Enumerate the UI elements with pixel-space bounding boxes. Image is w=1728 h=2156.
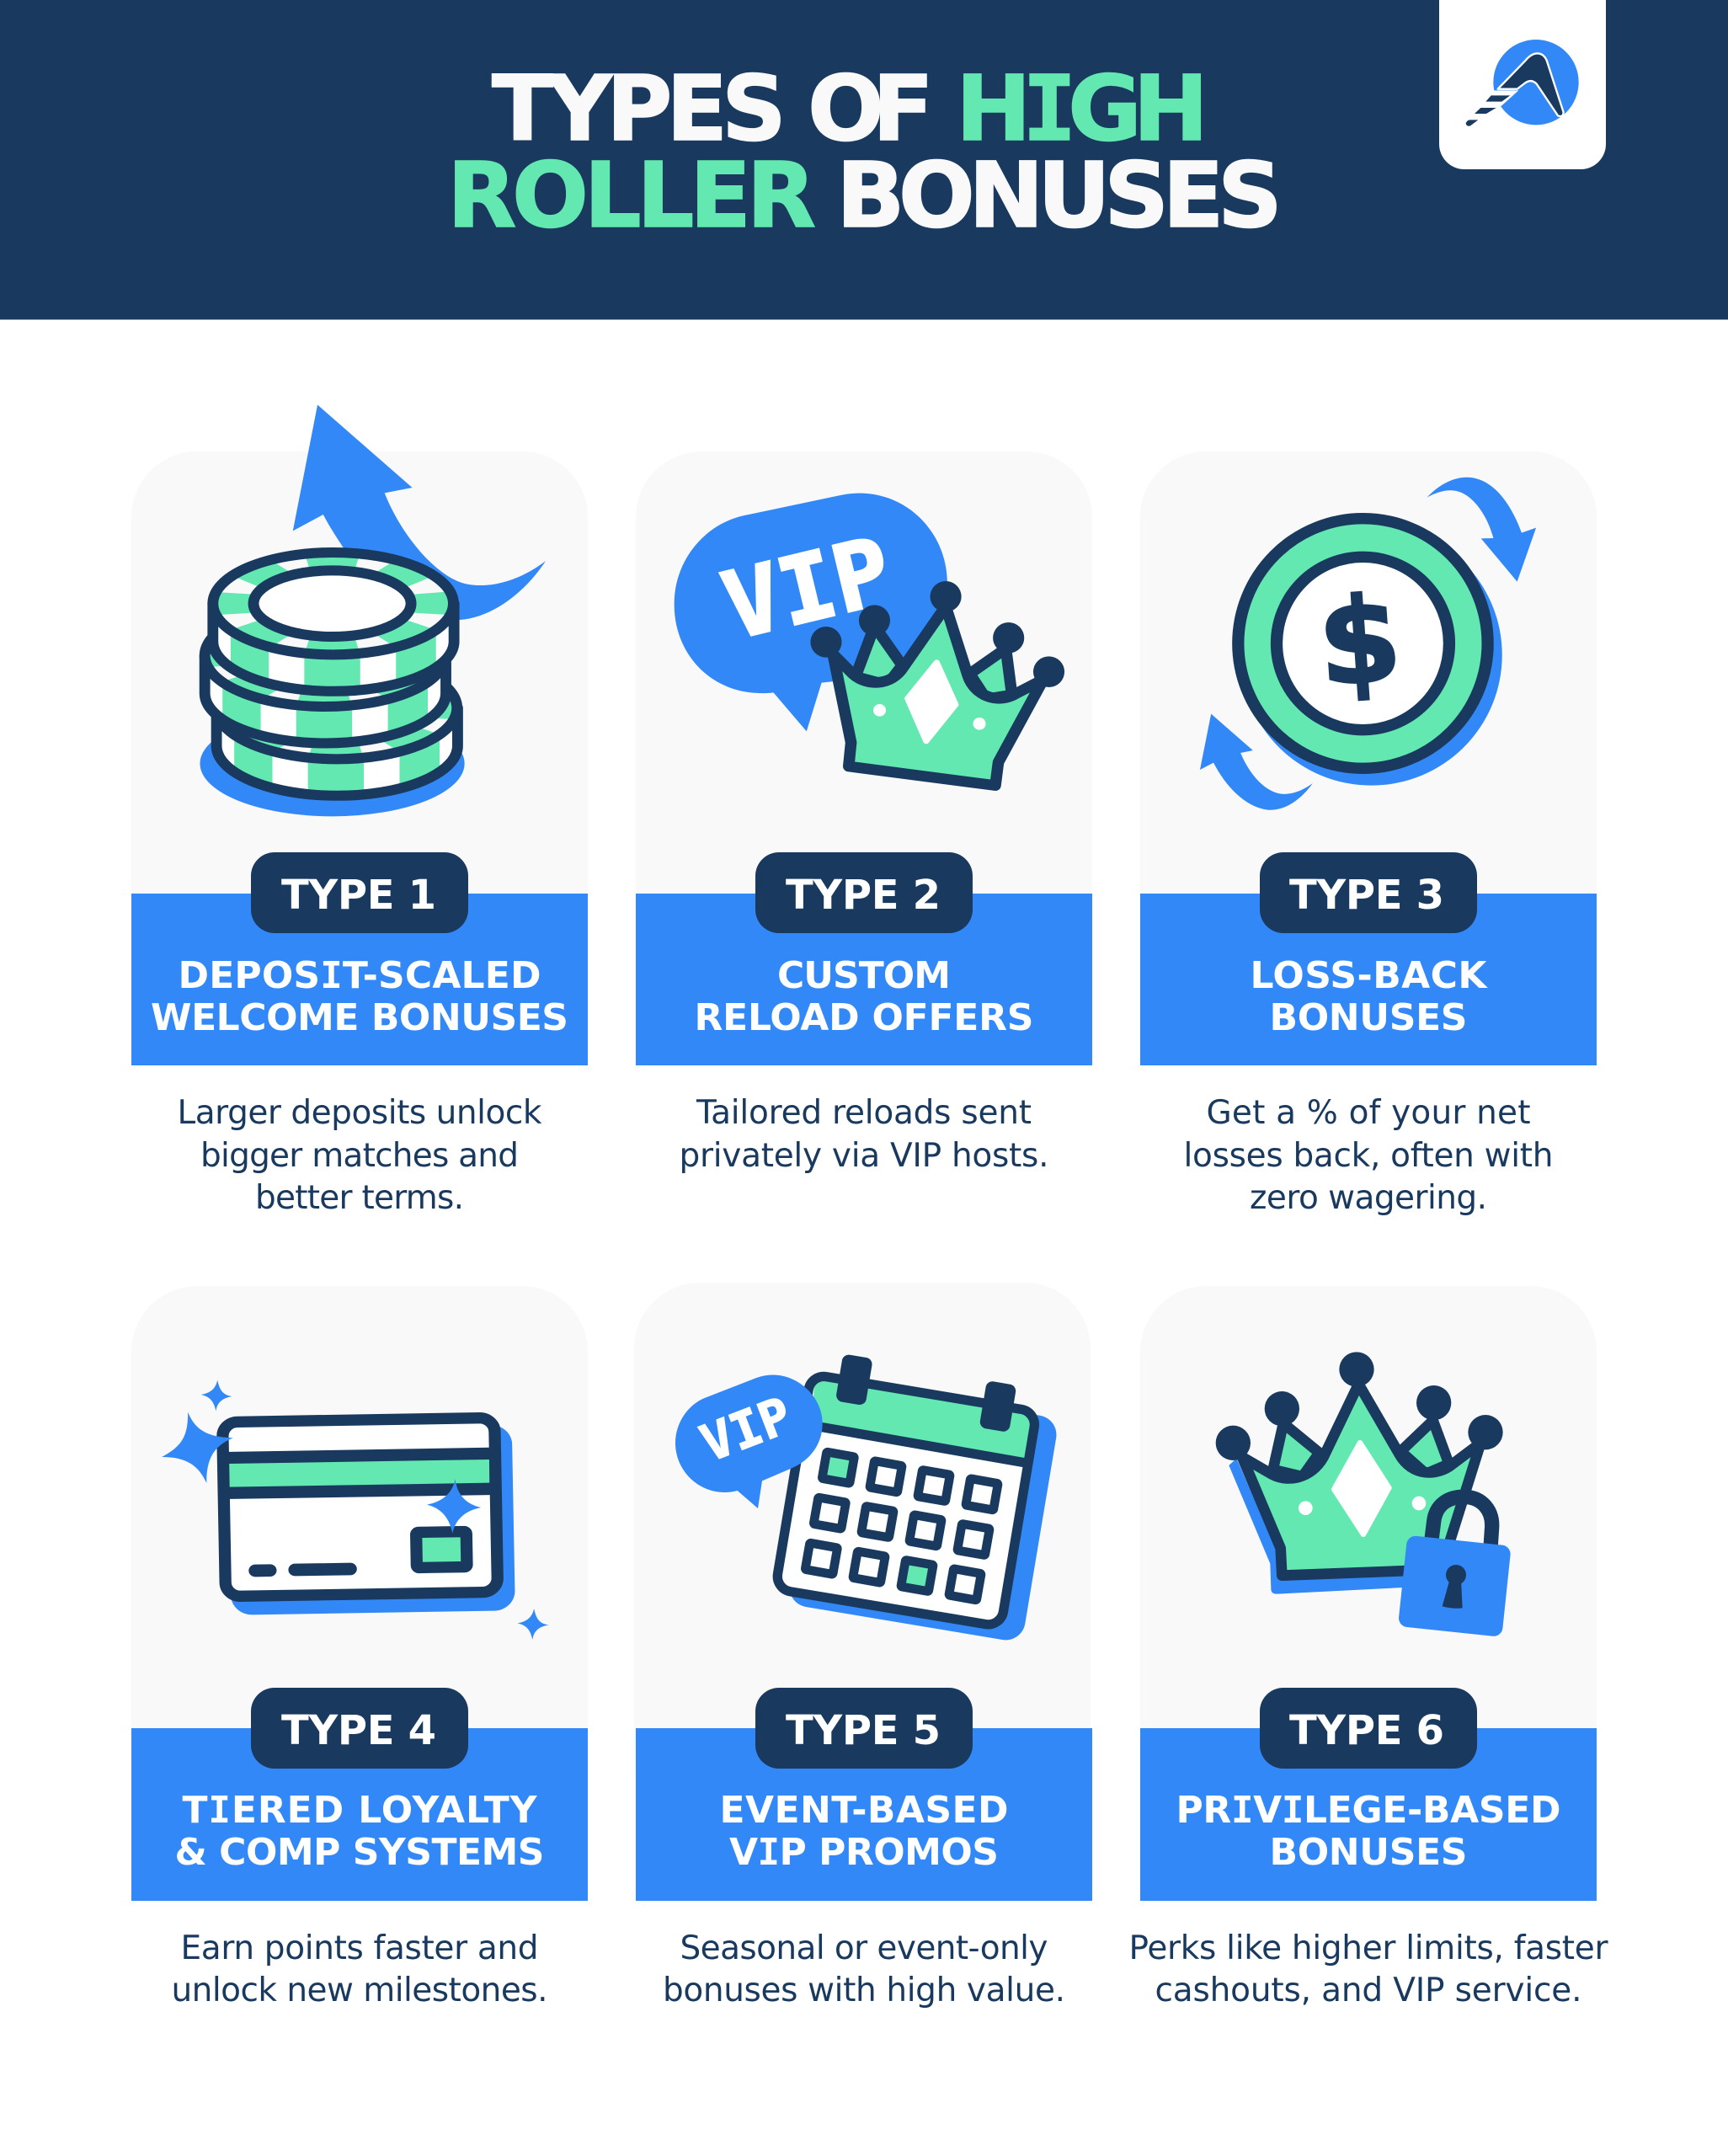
icon: VIP speech bubble [675, 494, 947, 731]
description: zero wagering. [1250, 1179, 1487, 1217]
panel: type 5 [634, 1283, 1092, 2009]
badge: type 2: TYPE 2 [786, 872, 941, 919]
title: ROLLER [447, 144, 816, 248]
description [177, 1094, 542, 1217]
icon: crown with padlock [1216, 1352, 1512, 1637]
panel: type 2 [636, 451, 1092, 1175]
description [1184, 1094, 1553, 1217]
heading: custom reload offers: RELOAD OFFERS [694, 996, 1034, 1039]
badge: type 6 [1260, 1688, 1477, 1769]
icon: dollar coin with cycle arrows: $ [1314, 571, 1405, 713]
description: Seasonal or event-only [680, 1929, 1048, 1967]
panel: type 4 [131, 1286, 588, 2009]
heading: tiered loyalty and comp systems: TIERED LOYALTY [182, 1789, 538, 1832]
icon: VIP speech bubble: VIP [713, 517, 901, 660]
title: HIGH [956, 57, 1208, 162]
description: Perks like higher limits, faster [1128, 1929, 1608, 1967]
description [172, 1929, 547, 2009]
icon: stacked casino chips with arrow [200, 405, 546, 816]
badge: type 4: TYPE 4 [281, 1707, 436, 1754]
panel: type 6 [1128, 1286, 1608, 2009]
heading: privilege-based bonuses [1176, 1789, 1561, 1874]
card background [634, 1283, 1091, 1822]
heading: tiered loyalty and comp systems [175, 1789, 544, 1874]
description [1128, 1929, 1608, 2009]
icon: logo mark [1466, 40, 1579, 126]
card background [1140, 451, 1597, 990]
heading: deposit-scaled welcome bonuses: DEPOSIT-SCALED [179, 954, 541, 997]
panel: type 1 [131, 405, 588, 1217]
card background [1140, 1286, 1597, 1825]
heading: tiered loyalty and comp systems: & COMP SYSTEMS [175, 1831, 544, 1874]
blue band [636, 1728, 1092, 1901]
VIP bubble label: VIP [693, 1386, 799, 1474]
heading: privilege-based bonuses: PRIVILEGE-BASED [1176, 1789, 1561, 1832]
badge: type 6: TYPE 6 [1289, 1707, 1444, 1754]
blue band [1140, 894, 1597, 1065]
blue band [636, 894, 1092, 1065]
title: OF [808, 57, 934, 162]
card background [636, 451, 1092, 990]
heading: privilege-based bonuses: BONUSES [1270, 1831, 1467, 1874]
badge: type 1: TYPE 1 [281, 872, 436, 919]
heading: loss-back bonuses: BONUSES [1270, 996, 1467, 1039]
title [447, 57, 1283, 248]
heading: event-based vip promos [719, 1789, 1009, 1874]
description: Larger deposits unlock [177, 1094, 542, 1132]
heading: loss-back bonuses [1250, 954, 1488, 1039]
badge: type 5: TYPE 5 [786, 1707, 941, 1754]
badge: type 3 [1260, 852, 1477, 933]
description: unlock new milestones. [172, 1972, 547, 2009]
title: TYPES [492, 57, 787, 162]
logo tile [1439, 0, 1606, 169]
card background [131, 451, 588, 990]
icon: dollar coin with cycle arrows [1200, 478, 1536, 810]
heading: deposit-scaled welcome bonuses [151, 954, 568, 1039]
description: bonuses with high value. [663, 1972, 1065, 2009]
description: privately via VIP hosts. [679, 1137, 1049, 1175]
description: bigger matches and [200, 1137, 519, 1175]
blue band [131, 1728, 588, 1901]
heading: loss-back bonuses: LOSS-BACK [1250, 954, 1488, 997]
description [663, 1929, 1065, 2009]
description [679, 1094, 1049, 1175]
description: cashouts, and VIP service. [1155, 1972, 1581, 2009]
icon: credit card with sparkles [162, 1380, 549, 1640]
panel: type 3 [1140, 451, 1597, 1217]
title: BONUSES [836, 144, 1283, 248]
blue band [131, 894, 588, 1065]
badge: type 2 [755, 852, 973, 933]
description: Earn points faster and [180, 1929, 539, 1967]
heading: deposit-scaled welcome bonuses: WELCOME BONUSES [151, 996, 568, 1039]
description: better terms. [255, 1179, 464, 1217]
heading: custom reload offers: CUSTOM [777, 954, 951, 997]
badge: type 3: TYPE 3 [1289, 872, 1444, 919]
header band [0, 0, 1728, 320]
icon: crown [810, 581, 1064, 786]
badge: type 4 [251, 1688, 468, 1769]
icon: calendar [675, 1353, 1059, 1643]
heading: event-based vip promos: VIP PROMOS [729, 1831, 999, 1874]
badge: type 1 [251, 852, 468, 933]
description: losses back, often with [1184, 1137, 1553, 1175]
blue band [1140, 1728, 1597, 1901]
heading: custom reload offers [694, 954, 1034, 1039]
description: Get a % of your net [1206, 1094, 1531, 1132]
badge: type 5 [755, 1688, 973, 1769]
description: Tailored reloads sent [696, 1094, 1032, 1132]
heading: event-based vip promos: EVENT-BASED [719, 1789, 1009, 1832]
card background [131, 1286, 588, 1825]
